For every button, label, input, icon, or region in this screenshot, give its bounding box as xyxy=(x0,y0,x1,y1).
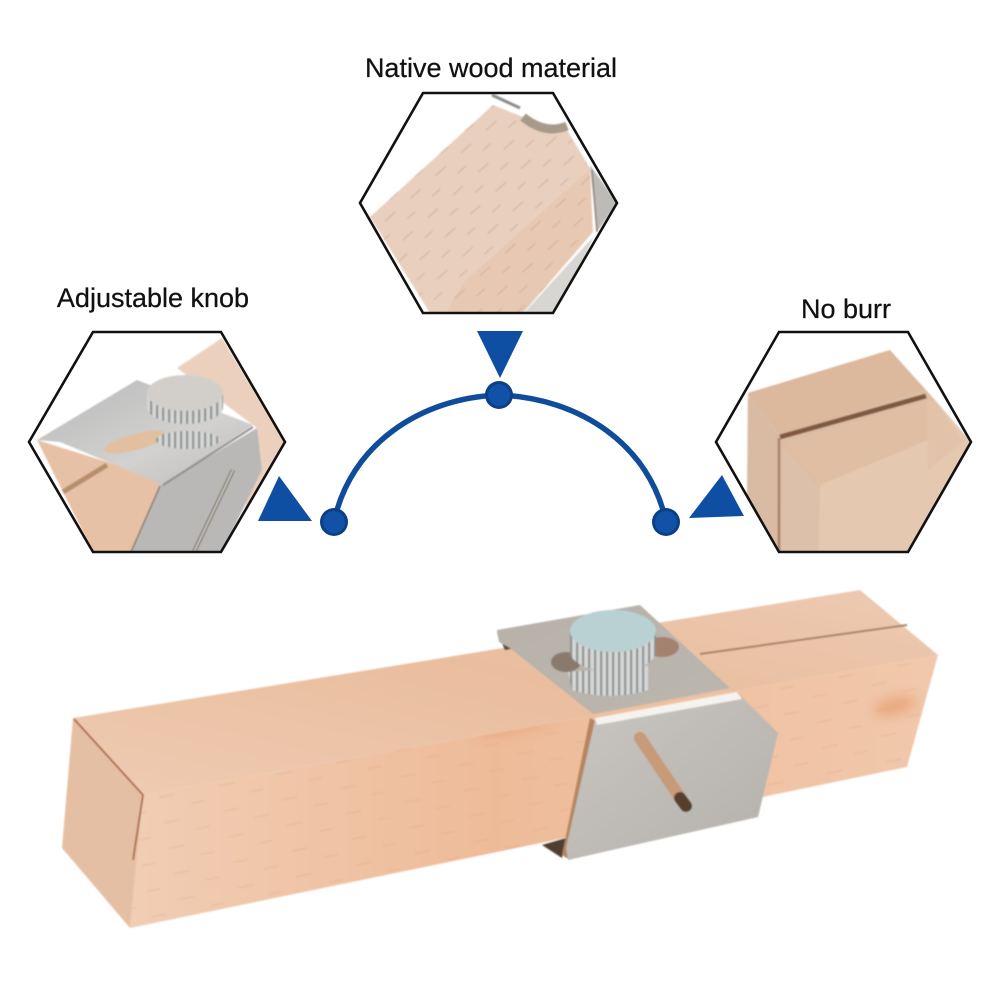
arrow: right xyxy=(689,475,744,518)
metal front plate xyxy=(130,428,262,552)
orange wood patches xyxy=(473,693,918,740)
title: Native wood material: Native wood material xyxy=(365,53,617,83)
metal and knob peek xyxy=(492,95,520,108)
block end face xyxy=(62,718,143,928)
dot: left xyxy=(320,508,348,536)
front plate xyxy=(566,693,778,860)
wood lower left xyxy=(37,440,165,552)
under tab xyxy=(542,838,566,858)
plate slot xyxy=(104,430,166,454)
dot: right xyxy=(652,508,680,536)
saw cut xyxy=(780,396,926,437)
knob xyxy=(147,393,223,424)
wood upper right xyxy=(177,338,285,510)
block top face xyxy=(73,590,938,795)
clip edge xyxy=(562,718,597,860)
thumb knob xyxy=(568,610,656,696)
front slot xyxy=(640,738,685,805)
panel: native wood material hexagon xyxy=(360,93,617,313)
panel: adjustable knob hexagon xyxy=(29,332,285,552)
dot: top xyxy=(485,381,513,409)
top plate xyxy=(497,605,730,714)
metal top plate xyxy=(37,380,253,485)
top plate slot xyxy=(551,652,581,672)
arrow: top xyxy=(477,331,523,378)
bend highlight xyxy=(595,692,742,725)
wood side face xyxy=(445,168,593,313)
wood base xyxy=(750,358,936,551)
label: No burr: No burr xyxy=(801,294,891,324)
shadow and metal edge xyxy=(590,165,617,232)
back top face xyxy=(750,350,901,394)
front slot xyxy=(194,470,233,552)
main wooden block tool xyxy=(62,590,938,928)
arrow: left xyxy=(258,476,312,521)
left side xyxy=(747,393,778,552)
panel: no burr hexagon xyxy=(716,332,971,552)
block front face xyxy=(130,655,938,928)
front chamfer side xyxy=(781,445,820,552)
knob reflection xyxy=(156,431,220,449)
arc connector xyxy=(320,381,680,536)
lower front face xyxy=(818,414,969,550)
front top face xyxy=(824,407,928,482)
saw slot xyxy=(700,625,907,654)
end grain edges xyxy=(74,719,143,860)
metal clip xyxy=(497,605,778,860)
wood top face xyxy=(370,105,590,313)
label: Adjustable knob: Adjustable knob xyxy=(57,283,249,313)
rear lip xyxy=(497,632,515,650)
